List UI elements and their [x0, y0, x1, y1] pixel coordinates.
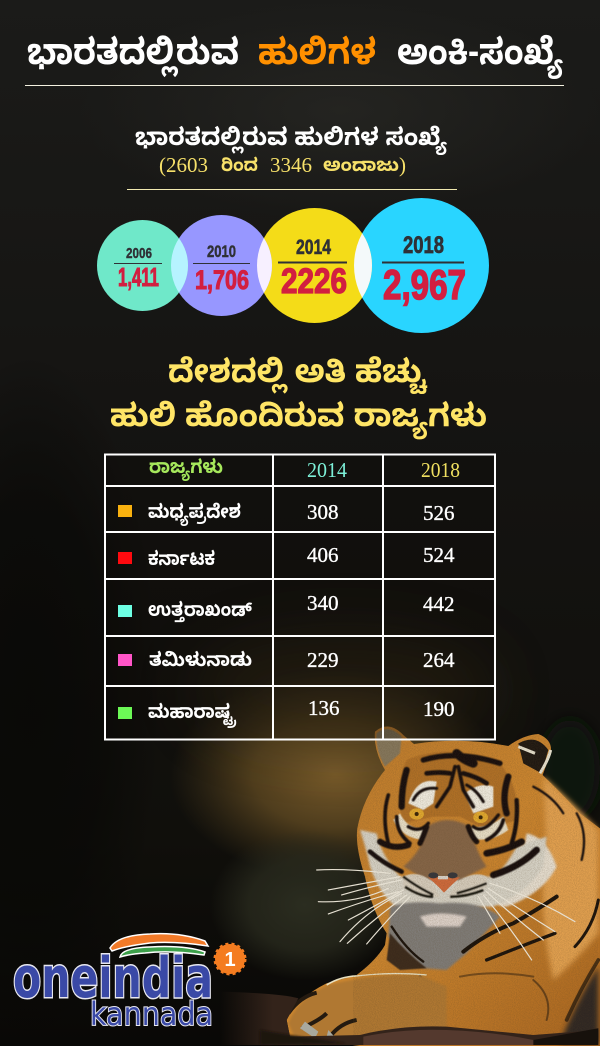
whisker pads	[403, 874, 487, 898]
table grid	[105, 454, 495, 740]
logo swoosh	[110, 934, 208, 957]
row: Maharashtra: 190	[423, 697, 454, 721]
row: Tamil Nadu: 229	[307, 648, 338, 672]
row: Karnataka: 524	[423, 543, 455, 567]
row: Karnataka: ಕರ್ನಾಟಕ	[148, 549, 215, 576]
row: Uttarakhand: ಉತ್ತರಾಖಂಡ್	[148, 600, 253, 627]
bubble 2006	[97, 220, 188, 311]
face stripes	[370, 753, 584, 875]
row: Tamil Nadu	[118, 648, 455, 677]
bubble 2018	[354, 198, 489, 333]
row: Karnataka: 406	[307, 543, 338, 567]
muzzle bridge	[403, 820, 487, 880]
white neck fringe	[493, 833, 557, 907]
white cheek mane	[360, 830, 547, 910]
table header: 2018	[421, 458, 460, 482]
subtitle: )	[399, 153, 406, 177]
bubble overlaps	[171, 233, 372, 298]
row: Tamil Nadu: ತಮಿಳುನಾಡು	[149, 650, 252, 677]
tiger nose	[428, 872, 460, 893]
bubble 2006: 1,411	[118, 262, 159, 292]
fur texture	[353, 720, 598, 1045]
logo wordmark: oneindia	[13, 946, 213, 1011]
table header: 2014	[307, 458, 347, 482]
row: Madhya Pradesh	[118, 500, 454, 529]
bubble 2014: 2226	[281, 262, 347, 301]
section heading	[110, 356, 487, 444]
row: Madhya Pradesh: 526	[423, 501, 454, 525]
title underline	[25, 85, 564, 86]
row: Uttarakhand	[118, 591, 454, 627]
tiger photo illustration	[220, 720, 600, 1046]
grey beard	[388, 902, 500, 970]
forehead	[399, 752, 517, 830]
logo badge: 1	[224, 949, 236, 971]
logo: oneindia kannada	[13, 934, 245, 1033]
bubble 2018: 2018	[403, 232, 444, 259]
table background tint	[106, 456, 493, 739]
shadowed lower flank	[560, 967, 598, 1043]
table: tigers by state	[105, 454, 495, 740]
tiger body and head silhouette	[287, 727, 600, 1046]
logo kannada: kannada	[90, 995, 213, 1033]
tiger eyes	[409, 808, 488, 823]
bubble 2010	[171, 215, 272, 316]
lit shoulder fur	[543, 777, 598, 980]
bubble chart: tiger count by year	[97, 198, 489, 333]
title: ಅಂಕಿ-ಸಂಖ್ಯೆ	[397, 34, 563, 84]
white eye patches	[393, 781, 508, 840]
logo badge	[215, 944, 245, 974]
subtitle: ಅಂದಾಜು	[323, 156, 399, 181]
subtitle: 3346	[270, 153, 312, 177]
rock ledge	[220, 992, 598, 1045]
bubble 2014	[257, 208, 372, 323]
paw	[288, 974, 447, 1043]
row: Karnataka	[118, 543, 455, 576]
bubble 2010: 1,706	[195, 265, 249, 295]
subtitle underline	[127, 189, 457, 190]
bubble 2014: 2014	[296, 236, 331, 259]
title: ಹುಲಿಗಳ	[258, 34, 376, 84]
dark neck band	[387, 933, 427, 970]
row: Madhya Pradesh: 308	[307, 500, 338, 524]
row: Tamil Nadu: 264	[423, 648, 455, 672]
body stripes	[392, 897, 598, 1020]
row: Madhya Pradesh: ಮಧ್ಯಪ್ರದೇಶ	[148, 502, 241, 529]
bubble 2018: 2,967	[383, 261, 466, 308]
table header	[149, 457, 460, 484]
subtitle	[135, 125, 447, 181]
title: ಭಾರತದಲ್ಲಿರುವ	[27, 34, 239, 84]
row: Maharashtra: ಮಹಾರಾಷ್ಟ್ರ	[148, 702, 237, 729]
table header: ರಾಜ್ಯಗಳು	[149, 457, 223, 484]
bubble 2010: 2010	[207, 242, 236, 261]
row: Maharashtra: 136	[308, 696, 340, 720]
bubble 2006: 2006	[126, 245, 152, 262]
subtitle: ರಿಂದ	[221, 156, 258, 181]
row: Uttarakhand: 340	[307, 591, 338, 615]
row: Uttarakhand: 442	[423, 592, 454, 616]
title	[27, 34, 563, 84]
ear details	[376, 729, 551, 773]
subtitle: ಭಾರತದಲ್ಲಿರುವ ಹುಲಿಗಳ ಸಂಖ್ಯೆ	[135, 125, 447, 158]
subtitle: (2603	[159, 153, 208, 177]
row: Maharashtra	[118, 696, 454, 729]
section heading: ಹುಲಿ ಹೊಂದಿರುವ ರಾಜ್ಯಗಳು	[110, 400, 487, 444]
section heading: ದೇಶದಲ್ಲಿ ಅತಿ ಹೆಚ್ಚು	[168, 356, 428, 400]
whiskers	[317, 870, 575, 960]
